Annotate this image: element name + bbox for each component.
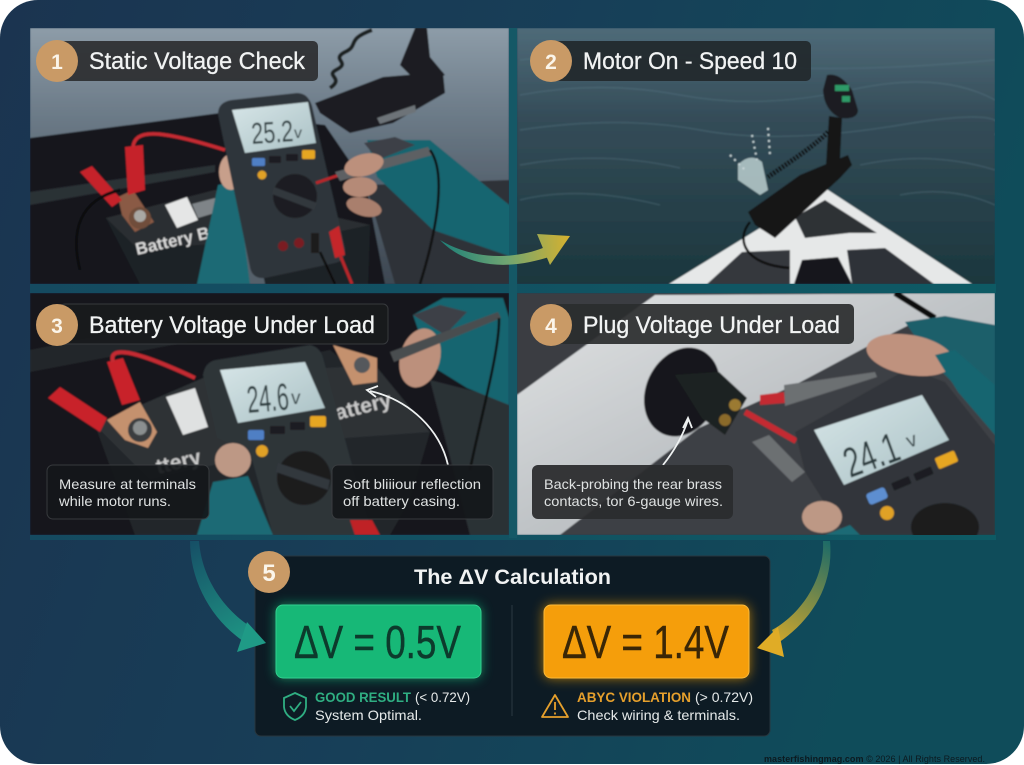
icon: warning triangle xyxy=(542,695,568,717)
callout: reflection xyxy=(332,465,493,519)
footer credit: masterfishingmag.com © 2026 | All Rights Reserved. xyxy=(764,754,985,764)
violation box: ΔV = 1.4V xyxy=(562,616,729,668)
panel 2: motor on photo xyxy=(517,28,999,284)
panel 1: static voltage check photo: Battery B xyxy=(134,223,212,259)
step 1 label: 1 xyxy=(51,51,63,74)
callout: reflection: Soft bliiiour reflection xyxy=(343,476,481,492)
callout: measure at terminals xyxy=(47,465,209,519)
panel 3: battery voltage under load photo: 24.6 xyxy=(245,376,291,422)
step 4 label: Plug Voltage Under Load xyxy=(583,312,840,339)
violation box xyxy=(544,605,749,678)
good result text: (< 0.72V) xyxy=(415,689,470,705)
panel 1: static voltage check photo: v xyxy=(294,125,302,142)
callout: back-probing: contacts, tor 6-gauge wires. xyxy=(544,493,723,509)
callout: back-probing: Back-probing the rear brass xyxy=(544,476,722,492)
panel 4: plug voltage under load photo xyxy=(517,293,995,551)
step 2 label: 2 xyxy=(545,51,557,74)
callout: measure at terminals: while motor runs. xyxy=(58,493,171,509)
step 3 label: Battery Voltage Under Load xyxy=(89,312,375,339)
annotation arrow: reflection xyxy=(367,386,448,465)
arrow: step 1 to step 2 xyxy=(440,234,570,265)
step 5 badge: 5 xyxy=(262,560,276,587)
step 3 label xyxy=(36,304,388,346)
panel 4: plug voltage under load photo: v xyxy=(903,429,920,453)
icon: shield xyxy=(284,693,306,720)
step 2 label: Motor On - Speed 10 xyxy=(583,48,797,75)
violation text: Check wiring & terminals. xyxy=(577,707,740,723)
step 4 label: 4 xyxy=(545,315,557,338)
step 1 label xyxy=(36,40,318,82)
callout: back-probing xyxy=(532,465,733,519)
panel 3: battery voltage under load photo: attery xyxy=(333,389,394,425)
step 5 badge xyxy=(248,551,290,593)
good result box: ΔV = 0.5V xyxy=(294,616,461,668)
step 4 label xyxy=(530,304,854,346)
panel 3: battery voltage under load photo: v xyxy=(291,388,301,409)
violation text: (> 0.72V) xyxy=(695,689,753,705)
callout: reflection: off battery casing. xyxy=(343,493,460,509)
step 1 label: Static Voltage Check xyxy=(89,48,306,75)
panel 5 heading: The ΔV Calculation xyxy=(414,566,611,589)
step 2 label xyxy=(530,40,811,82)
good result box xyxy=(276,605,481,678)
panel 3: battery voltage under load photo: ttery xyxy=(154,445,204,479)
good result text: GOOD RESULT xyxy=(315,689,411,705)
step 3 label: 3 xyxy=(51,315,63,338)
arrow: step 4 to violation xyxy=(757,541,830,657)
annotation arrow: rear contacts xyxy=(663,418,692,465)
good result text: System Optimal. xyxy=(315,707,422,723)
panel 4: plug voltage under load photo: 24.1 xyxy=(837,423,906,486)
arrow: step 3 to good result xyxy=(190,541,266,652)
panel 5: delta V calculation xyxy=(248,551,770,736)
violation text: ABYC VIOLATION xyxy=(577,689,691,705)
panel frame lines xyxy=(30,28,996,540)
callout: measure at terminals: Measure at terminals xyxy=(59,476,196,492)
panel 1: static voltage check photo xyxy=(30,28,512,284)
panel 1: static voltage check photo: 25.2 xyxy=(250,115,294,151)
panel 3: battery voltage under load photo xyxy=(30,293,509,535)
